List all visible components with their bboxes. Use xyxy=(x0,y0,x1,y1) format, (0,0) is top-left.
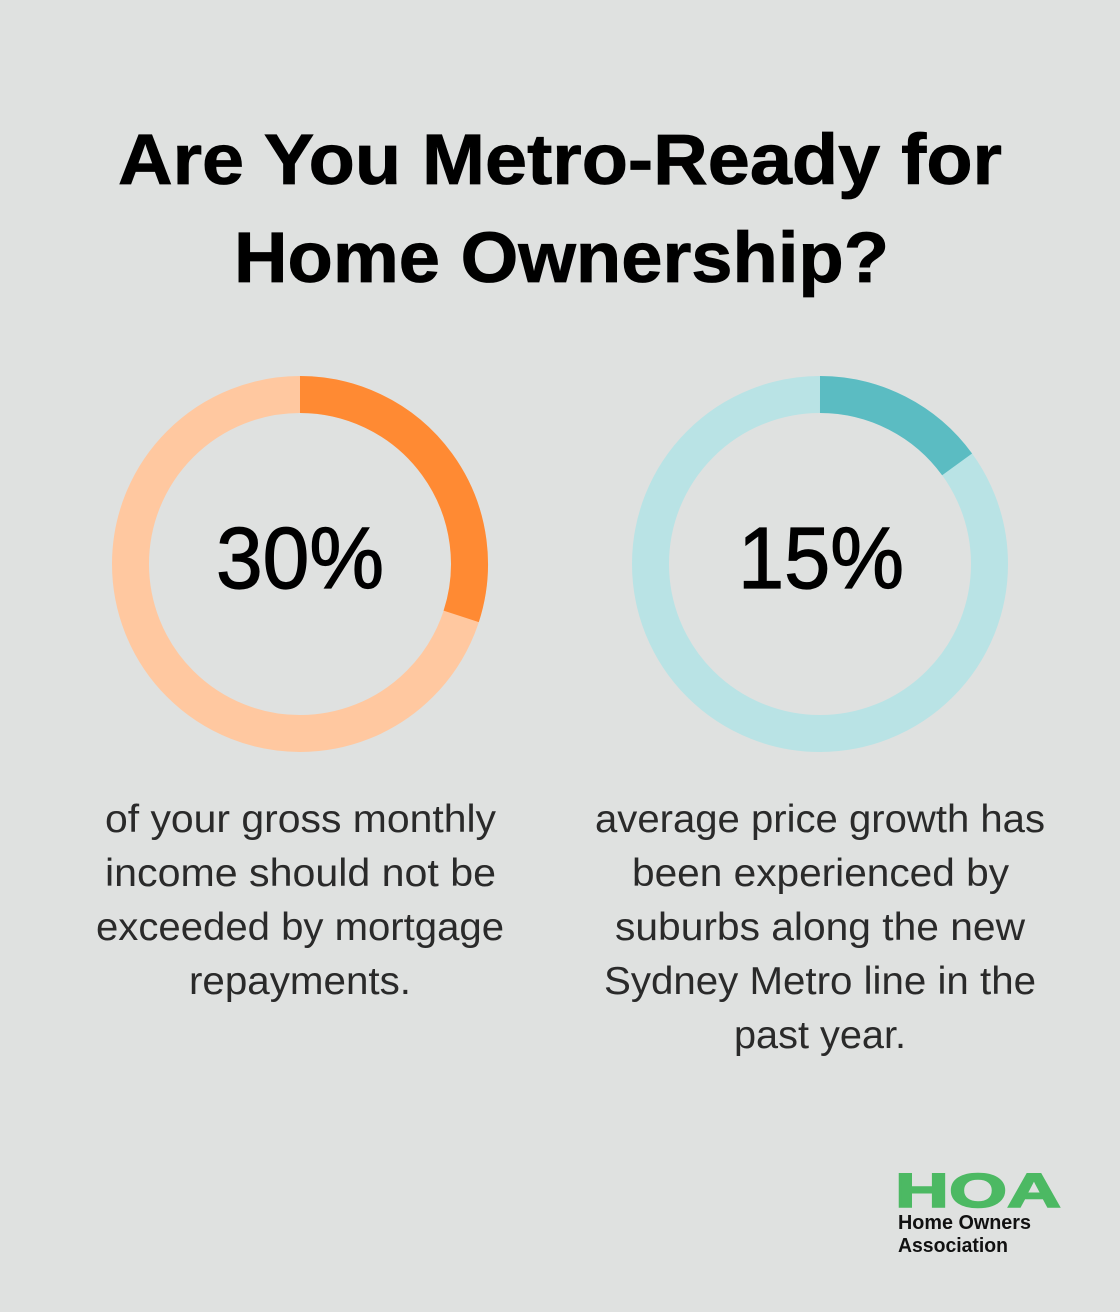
description: mortgage repayments: income should not be xyxy=(105,852,496,895)
donut chart: 15% xyxy=(650,394,990,734)
donut chart: 30% xyxy=(130,394,470,734)
description: mortgage repayments: of your gross monthly xyxy=(105,798,497,841)
description: mortgage repayments: exceeded by mortgage xyxy=(96,906,504,949)
description: mortgage repayments: repayments. xyxy=(189,960,411,1003)
title xyxy=(118,121,1002,298)
title: Home Ownership? xyxy=(234,219,889,298)
logo: Home Owners Association: Association xyxy=(898,1235,1008,1257)
description: price growth: Sydney Metro line in the xyxy=(604,960,1036,1003)
value: 15%: 15% xyxy=(738,510,904,607)
panel: 15% statistic xyxy=(595,394,1045,1057)
title: Are You Metro-Ready for xyxy=(118,121,1002,200)
description: price growth xyxy=(595,798,1045,1057)
description: price growth: suburbs along the new xyxy=(615,906,1026,949)
value: 30%: 30% xyxy=(216,510,384,607)
description: price growth: past year. xyxy=(734,1014,906,1057)
description: mortgage repayments xyxy=(96,798,504,1003)
logo: Home Owners Association: Home Owners xyxy=(898,1212,1031,1234)
panel: 30% statistic xyxy=(96,394,504,1003)
description: price growth: average price growth has xyxy=(595,798,1045,841)
description: price growth: been experienced by xyxy=(632,852,1010,895)
logo: Home Owners Association xyxy=(895,1165,1061,1257)
logo: Home Owners Association: HOA xyxy=(895,1165,1061,1218)
